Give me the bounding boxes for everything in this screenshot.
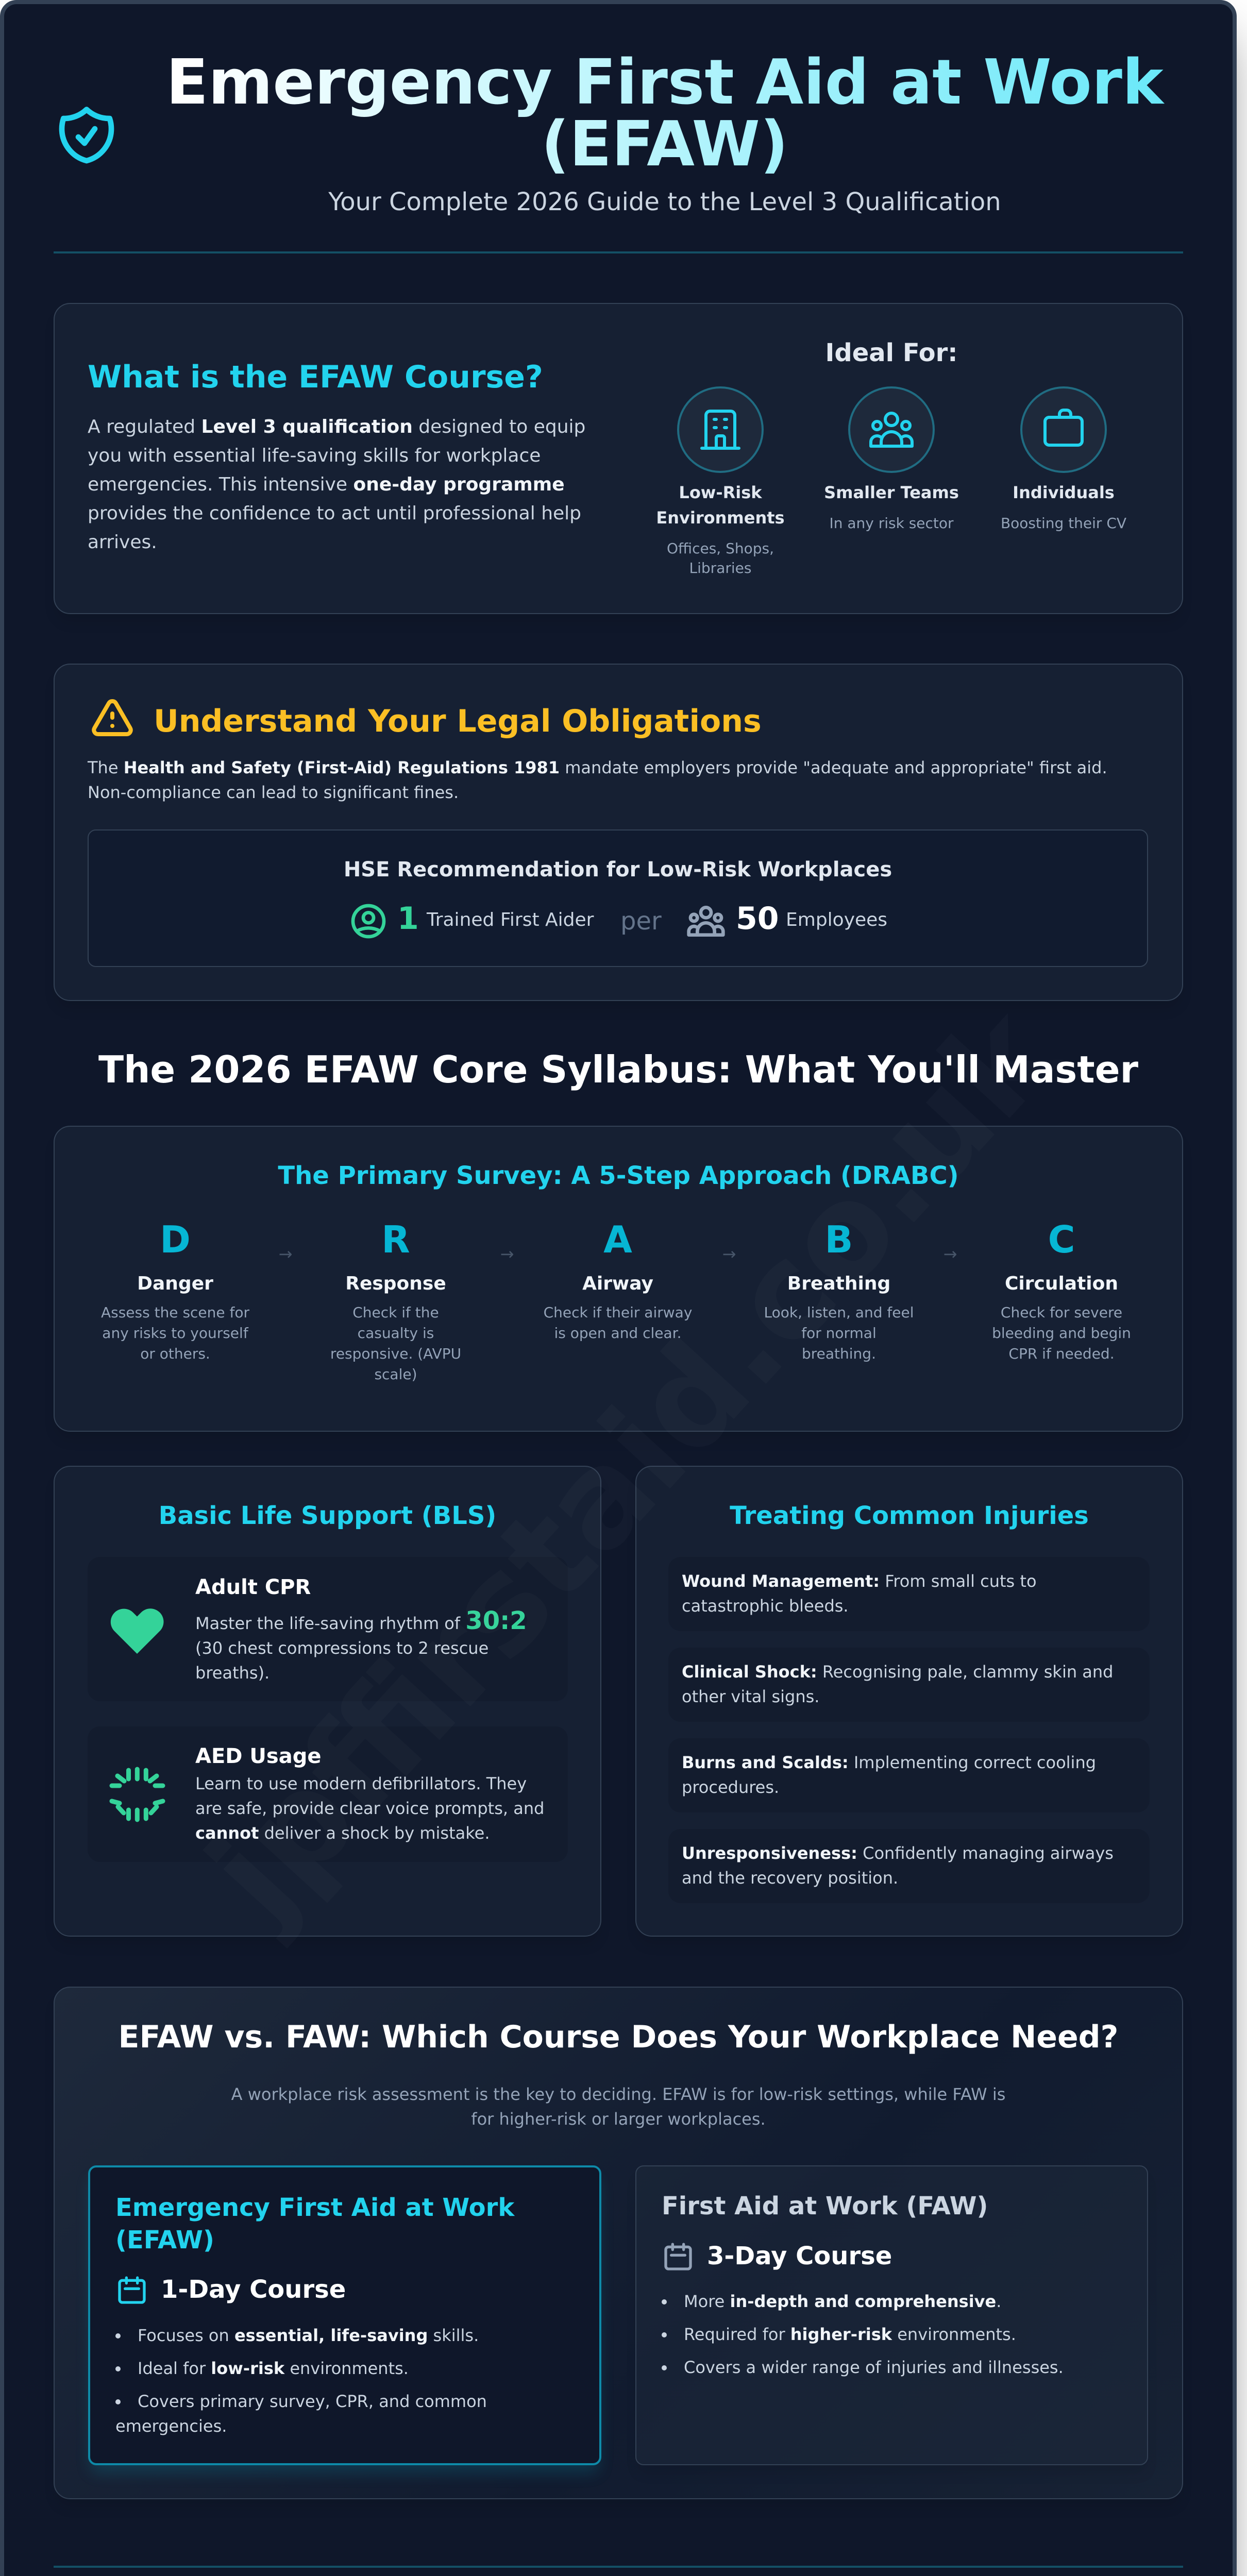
FAW course points: More in-depth and comprehensive. [684,2292,1001,2311]
note: offices, shops, libraries [667,540,774,577]
heading: what is the EFAW course: What is the EFAW Course? [88,359,543,395]
panel: primary survey [54,1126,1183,1432]
unresponsiveness text: and the recovery position. [682,1868,898,1888]
title: Emergency First Aid at Work [166,47,1164,118]
step: B breathing: breathing. [802,1345,876,1362]
heading: ideal for: Ideal For: [825,338,957,367]
note: in any risk sector: In any risk sector [829,515,954,532]
step: C circulation: C [1048,1218,1075,1261]
step: A airway [544,1218,692,1342]
course description: emergencies. This intensive one-day programme [88,474,565,495]
wound management text: Wound Management: From small cuts to [682,1571,1037,1591]
step: C circulation: bleeding and begin [992,1325,1131,1342]
title [146,52,1183,176]
FAW course points [662,2289,1064,2388]
heading: primary survey: The Primary Survey: A 5-Step Approach (DRABC) [278,1161,959,1190]
icon: first aider [351,904,385,939]
step: C circulation [992,1218,1131,1362]
adult CPR text: breaths). [195,1663,269,1683]
note: offices, shops, libraries: Libraries [689,560,751,577]
comparison intro: A workplace risk assessment is the key to deciding. EFAW is for low-risk settings, while FAW is [231,2084,1005,2104]
icon: calendar [662,2240,695,2273]
arrow: → [279,1244,292,1264]
FAW course points: Required for higher-risk environments. [684,2325,1016,2344]
step: R response: casualty is [358,1325,434,1342]
title: (EFAW) [541,109,788,180]
step: R response: R [381,1218,410,1261]
burns and scalds text: procedures. [682,1777,779,1797]
icon: warning triangle [92,699,133,736]
adult CPR text: (30 chest compressions to 2 rescue [195,1638,488,1658]
burns and scalds text: Burns and Scalds: Implementing correct cooling [682,1753,1096,1772]
icon: AED pulse [109,1767,165,1822]
step: A airway: Airway [582,1273,653,1294]
course description [88,416,585,553]
clinical shock text [682,1662,1113,1706]
adult CPR text: Master the life-saving rhythm of 30:2 [195,1606,527,1635]
stat: 50: 50 [736,901,779,937]
ideal for: smaller teams [848,386,935,473]
stat label: employees: Employees [786,909,887,930]
label: low-risk environments: Low-Risk [679,483,762,502]
step: D danger: or others. [140,1345,210,1362]
step: R response: Response [345,1273,446,1294]
unresponsiveness text [682,1843,1114,1888]
step: C circulation: CPR if needed. [1008,1345,1115,1362]
step: B breathing: for normal [801,1325,877,1342]
item: AED usage [88,1726,568,1862]
course description: provides the confidence to act until professional help [88,503,581,524]
adult CPR text [195,1606,527,1683]
EFAW course points: emergencies. [115,2416,227,2436]
course description: you with essential life-saving skills for workplace [88,445,541,466]
step: B breathing: Look, listen, and feel [764,1304,914,1321]
step: A airway: A [603,1218,632,1261]
step: C circulation: Check for severe [1001,1304,1122,1321]
adult CPR title: Adult CPR [195,1575,311,1599]
item: unresponsiveness [668,1829,1150,1903]
AED usage text: are safe, provide clear voice prompts, and [195,1799,544,1818]
wound management text: catastrophic bleeds. [682,1596,849,1616]
comparison intro: for higher-risk or larger workplaces. [471,2109,766,2129]
step: B breathing: Breathing [787,1273,890,1294]
step: D danger: any risks to yourself [102,1325,248,1342]
heading: core syllabus: The 2026 EFAW Core Syllabus: What You'll Master [98,1048,1138,1091]
course description: A regulated Level 3 qualification designed to equip [88,416,585,437]
panel: treating common injuries [635,1466,1183,1937]
step: R response: Check if the [352,1304,439,1321]
clinical shock text: Clinical Shock: Recognising pale, clammy skin and [682,1662,1113,1682]
unresponsiveness text: Unresponsiveness: Confidently managing airways [682,1843,1114,1863]
panel: legal obligations [54,664,1183,1001]
legal text [88,758,1107,802]
subtitle: Your Complete 2026 Guide to the Level 3 Qualification [328,188,1001,216]
AED usage title: AED Usage [195,1744,321,1768]
EFAW course points: Ideal for low-risk environments. [138,2359,409,2378]
heading: treating common injuries: Treating Common Injuries [730,1501,1089,1530]
step: R response [330,1218,461,1383]
heading: HSE recommendation: HSE Recommendation for Low-Risk Workplaces [344,858,892,882]
panel: HSE recommendation [88,829,1148,967]
ideal for: low-risk environments [677,386,764,473]
header divider [54,251,1183,253]
step: D danger [101,1218,249,1362]
EFAW course points [115,2323,487,2447]
step: R response: scale) [374,1366,417,1383]
label: smaller teams: Smaller Teams [824,483,959,502]
arrow: → [943,1244,957,1264]
stat: 1: 1 [397,901,419,937]
legal text: Non-compliance can lead to significant fines. [88,783,459,802]
item: burns and scalds [668,1738,1150,1812]
panel: what is the EFAW course [54,303,1183,614]
step: C circulation: Circulation [1005,1273,1118,1294]
1-day course: 1-Day Course [161,2275,346,2304]
label: low-risk environments [656,483,785,528]
comparison intro [231,2084,1005,2129]
panel: EFAW vs FAW [54,1987,1183,2499]
heading: basic life support: Basic Life Support (BLS) [159,1501,496,1530]
EFAW course title: (EFAW) [115,2226,214,2255]
EFAW course points: Focuses on essential, life-saving skills. [138,2326,479,2345]
watermark: jpffirstaid.co.uk [179,979,1085,1947]
wound management text [682,1571,1037,1616]
AED usage text: cannot deliver a shock by mistake. [195,1823,490,1843]
heading: legal obligations: Understand Your Legal Obligations [154,703,762,739]
panel: basic life support [54,1466,601,1937]
AED usage text [195,1774,544,1843]
EFAW course title: Emergency First Aid at Work [115,2193,514,2222]
label: low-risk environments: Environments [656,508,785,528]
clinical shock text: other vital signs. [682,1687,819,1706]
step: A airway: Check if their airway [544,1304,692,1321]
ideal for: individuals [1020,386,1107,473]
step: D danger: Danger [137,1273,213,1294]
3-day course: 3-Day Course [707,2242,892,2270]
course description: arrives. [88,532,157,553]
heading: EFAW vs FAW: EFAW vs. FAW: Which Course Does Your Workplace Need? [119,2019,1118,2055]
AED usage text: Learn to use modern defibrillators. They [195,1774,527,1793]
footer divider [54,2566,1183,2568]
item: wound management [668,1557,1150,1631]
icon: heart [110,1608,164,1654]
per: per [620,907,662,936]
arrow: → [722,1244,736,1264]
step: D danger: Assess the scene for [101,1304,249,1321]
header icon: shield check [59,107,114,164]
item: adult CPR [88,1557,568,1701]
step: D danger: D [160,1218,191,1261]
note: boosting their CV: Boosting their CV [1001,515,1126,532]
step: B breathing [764,1218,914,1362]
stat label: trained first aider: Trained First Aider [427,909,594,930]
step: A airway: is open and clear. [554,1325,682,1342]
arrow: → [500,1244,514,1264]
FAW course points: Covers a wider range of injuries and illnesses. [684,2358,1064,2377]
FAW course title: First Aid at Work (FAW) [662,2192,988,2221]
item: clinical shock [668,1648,1150,1722]
legal text: The Health and Safety (First-Aid) Regulations 1981 mandate employers provide "adequate and appropriate" first aid. [88,758,1107,777]
step: R response: responsive. (AVPU [330,1345,461,1362]
step: B breathing: B [825,1218,853,1261]
panel: FAW course [635,2165,1148,2465]
icon: calendar [115,2274,148,2307]
label: individuals: Individuals [1013,483,1115,502]
burns and scalds text [682,1753,1096,1797]
note: offices, shops, libraries: Offices, Shops, [667,540,774,557]
EFAW course points: Covers primary survey, CPR, and common [138,2392,487,2411]
icon: employees [687,906,725,937]
EFAW course title [115,2193,515,2255]
panel: EFAW course [88,2165,601,2465]
